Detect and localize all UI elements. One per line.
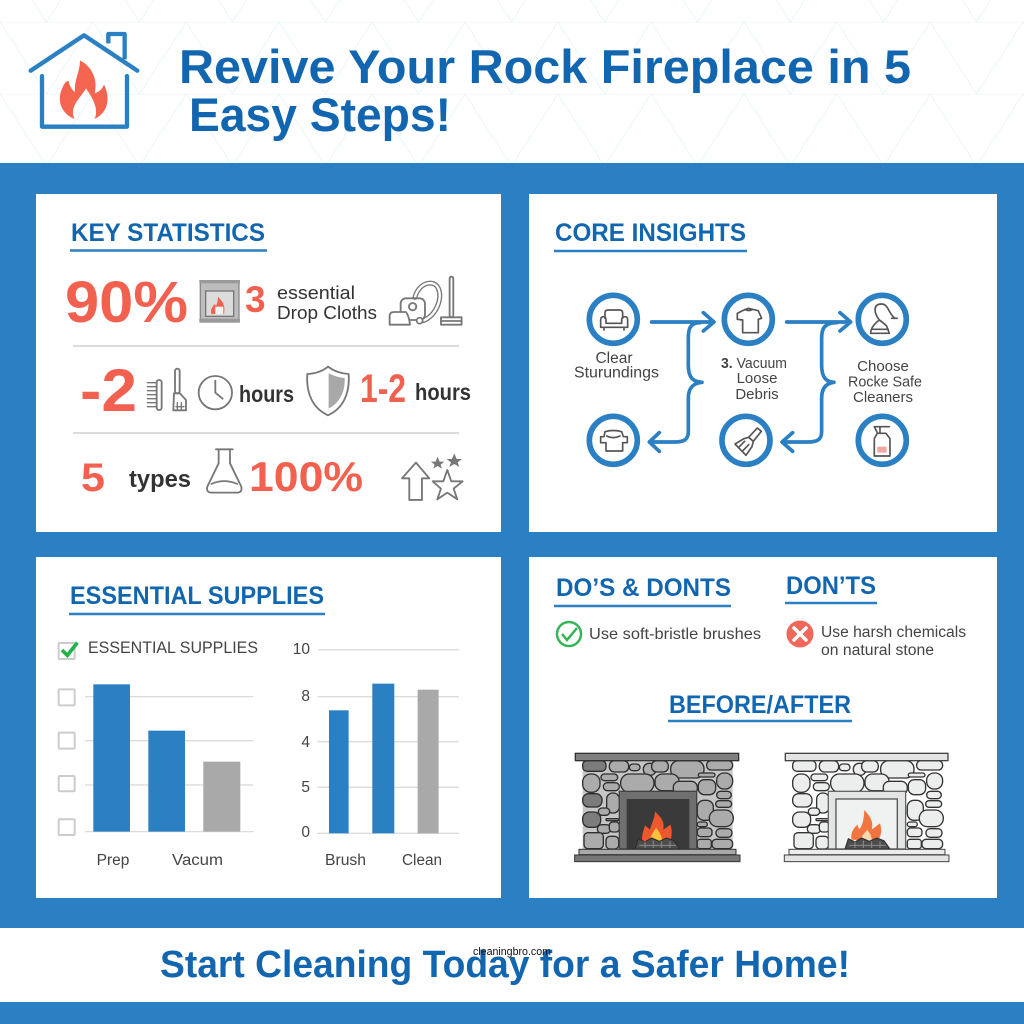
panel: essential supplies [36,557,501,898]
step label: clear surroundings [574,350,659,382]
do text: Use soft-bristle brushes [589,626,761,643]
panel: core insights [529,194,997,532]
stat: -2: -2 [80,357,137,424]
step label: vacuum loose debris: Loose [737,370,777,387]
step label: choose rock safe cleaners: Choose [857,358,909,375]
step label: vacuum loose debris: 3. Vacuum [721,355,787,372]
title: Easy Steps! [189,88,451,141]
bar chart: left [85,684,254,869]
stat: 3 essential drop cloths: Drop Cloths [277,303,377,323]
bar chart: left: Prep [97,852,129,869]
bar chart: right: Brush [325,852,366,869]
icon: fireplace [199,280,240,322]
icon: red cross [786,620,814,648]
step label: clear surroundings: Sturundings [574,364,659,382]
bar chart: right [293,641,459,869]
checklist: ESSENTIAL SUPPLIES [88,639,258,657]
step label: choose rock safe cleaners [848,358,922,406]
bar chart: right: 0 [301,824,310,841]
step icon: shirt [724,295,772,343]
step label: vacuum loose debris [721,355,787,403]
bar chart: right: 5 [301,779,310,796]
icon: brush and scraper [147,369,186,410]
footer band [0,928,1024,1002]
stat: 5 types [81,456,191,500]
icon: shield [307,367,349,415]
heading: essential supplies: ESSENTIAL SUPPLIES [70,582,324,610]
don't text: Use harsh chemicals [821,624,966,641]
stat: 100%: 100% [249,453,363,500]
bar chart: right: 4 [301,734,310,751]
bar chart: right: Clean [402,852,442,869]
header band [0,0,1024,163]
stat: 3 essential drop cloths: essential [277,283,355,303]
icon: clock [199,376,232,409]
step icon: spray bottle [858,416,906,464]
icon: house with flame [31,34,137,127]
illustration: fireplace after [784,753,949,862]
step icon: vacuum [858,295,906,343]
stat: 1-2 hours: 1-2 [360,367,406,411]
heading: do's and donts: DO’S & DONTS [556,574,731,602]
icon: green check [557,622,581,646]
flow diagram arrows [649,313,851,451]
stat: hours: hours [239,381,294,407]
stat: 1-2 hours [360,367,471,411]
stat: 3 essential drop cloths: 3 [245,279,266,320]
heading: key statistics: KEY STATISTICS [71,219,265,247]
watermark: cleaningbro.com [473,946,551,958]
panel: do's and don'ts, before/after [529,557,997,898]
step icon: brush [722,416,770,464]
don't text: on natural stone [821,642,934,659]
bar chart: left: Vacum [172,852,223,869]
title [179,40,911,141]
checklist [59,639,258,835]
icon: arrow and stars [402,453,463,500]
stat: 5 types: 5 [81,456,105,500]
icon: vacuum and mop [390,277,462,325]
stat: 90%: 90% [65,270,188,335]
icon: flask [207,449,242,493]
call to action: Start Cleaning Today for a Safer Home! [160,944,850,986]
illustration: fireplace before [575,753,740,862]
heading: core insights: CORE INSIGHTS [555,219,746,247]
stat: 1-2 hours: hours [415,379,471,405]
step label: vacuum loose debris: Debris [735,386,779,403]
don't text [821,624,966,659]
stat: 5 types: types [129,466,191,493]
step icon: gloves [589,416,637,464]
step label: clear surroundings: Clear [595,350,633,367]
bar chart: right: 10 [293,641,310,658]
step label: choose rock safe cleaners: Cleaners [853,389,913,406]
stat: 3 essential drop cloths [245,279,377,323]
panel: key statistics [36,194,501,532]
step icon: sofa [589,295,637,343]
heading: don'ts: DON’TS [786,572,876,600]
heading: before/after: BEFORE/AFTER [669,691,851,719]
title: Revive Your Rock Fireplace in 5 [179,40,911,93]
step label: choose rock safe cleaners: Rocke Safe [848,374,922,390]
bar chart: right: 8 [301,688,310,705]
